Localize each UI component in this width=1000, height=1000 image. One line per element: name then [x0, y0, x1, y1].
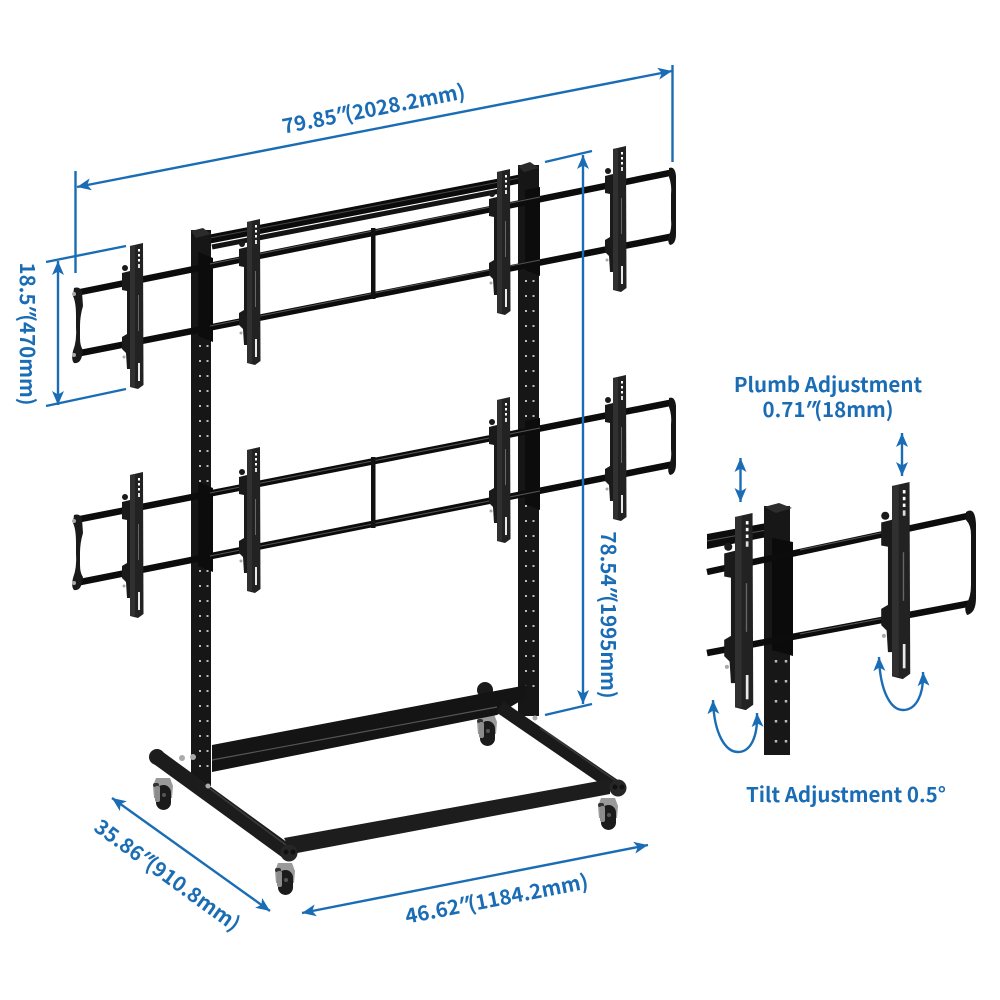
label: 35.86″(910.8mm) [89, 810, 247, 937]
detail rear bars [707, 522, 772, 549]
caster: rear left [153, 778, 173, 810]
base frame [149, 682, 626, 895]
label: 46.62″(1184.2mm) [402, 865, 590, 930]
bracket C [489, 169, 510, 315]
right side rail [500, 707, 618, 788]
rear knob [477, 682, 493, 698]
bracket D [605, 375, 626, 521]
bracket B [239, 447, 260, 593]
caption: tilt adjustment: Tilt Adjustment 0.5° [746, 778, 946, 808]
heading: plumb adjustment [734, 368, 922, 423]
plumb arrow left [739, 458, 742, 502]
heading: plumb adjustment: 0.71″(18mm) [763, 393, 893, 423]
right end plate [668, 398, 676, 475]
left column [191, 228, 213, 786]
heading: plumb adjustment: Plumb Adjustment [734, 368, 922, 398]
bottom row mount [72, 375, 676, 618]
detail right bracket [881, 482, 910, 679]
left end plate [72, 288, 83, 363]
dimension: mount height [14, 246, 126, 406]
dimension: overall height [545, 151, 625, 715]
bracket A [122, 472, 144, 618]
bracket D [605, 146, 626, 292]
label: 18.5″ (470mm) [14, 262, 44, 406]
plumb arrow right [901, 433, 903, 476]
rear top crossbars [210, 177, 525, 247]
tilt arrow left [713, 700, 757, 752]
dimension: overall width [76, 65, 672, 273]
caster: rear right [477, 714, 497, 746]
detail left bracket [724, 513, 753, 710]
tilt arrow right [879, 657, 923, 710]
detail column [764, 503, 793, 755]
detail panel: plumb and tilt adjustment [707, 368, 976, 808]
label: 79.85″(2028.2mm) [279, 75, 467, 140]
bracket B [239, 219, 260, 365]
upper and lower rails [78, 172, 672, 354]
caster: front left [275, 863, 295, 895]
bracket A [122, 243, 144, 389]
left side rail [157, 757, 289, 853]
bracket C [489, 397, 510, 543]
centre brace [371, 457, 376, 528]
dimension: base width [302, 845, 648, 930]
stand frame [191, 162, 540, 786]
right end plate [668, 168, 676, 245]
label: 78.54″ (1995mm) [595, 531, 625, 699]
detail rails [707, 515, 972, 653]
left end plate [72, 514, 83, 590]
caster: front right [598, 798, 618, 830]
top row mount [72, 146, 676, 389]
rear cross tubes [212, 685, 527, 772]
front bar [284, 779, 610, 854]
centre brace [371, 228, 376, 299]
upper and lower rails [78, 402, 672, 582]
detail end plate [965, 510, 976, 615]
tube end caps [149, 716, 626, 862]
right column [518, 162, 540, 716]
dimension: base depth [89, 798, 270, 937]
